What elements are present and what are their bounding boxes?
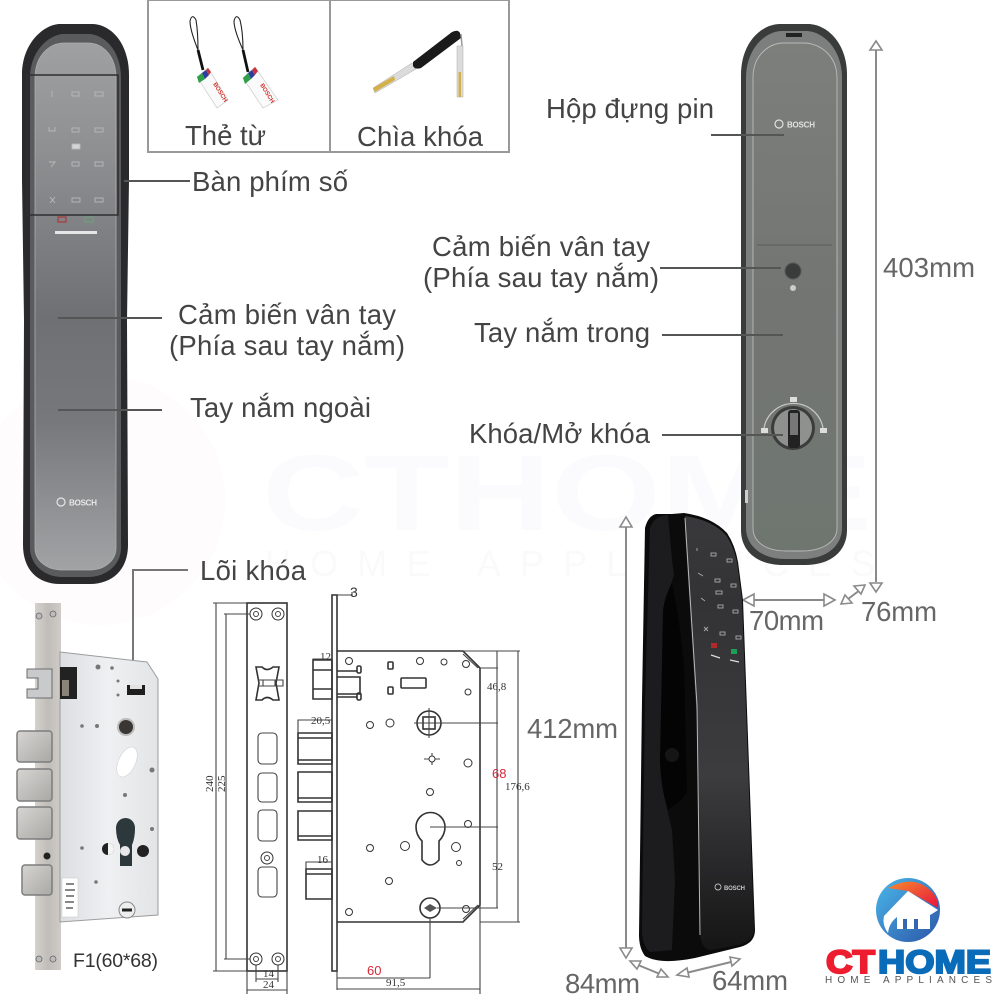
panel: accessories box (148, 0, 509, 152)
logo: CTHOME (825, 878, 992, 986)
keypad buttons (697, 548, 741, 639)
diagram: faceplate drawing: 14 (263, 968, 274, 980)
dimension: 76mm depth: 76mm (861, 596, 937, 627)
dimension: 403mm height: 403mm (883, 252, 975, 283)
dimension: 64mm width: 64mm (712, 965, 788, 996)
background watermark: CTHOME (262, 432, 872, 553)
latch and bolts (298, 660, 361, 899)
spindle hole (118, 719, 134, 735)
case holes (346, 658, 472, 916)
lock / unlock knob (761, 397, 827, 450)
dimension numbers: 176,6 (505, 781, 530, 793)
background watermark (0, 375, 875, 625)
panel: front of lock (22, 24, 129, 584)
dimension numbers: 46,8 (487, 681, 507, 693)
callout: outer handle: Tay nắm ngoài (190, 392, 371, 423)
dimension numbers: 68 (492, 766, 506, 781)
dimension: 84mm depth: 84mm (565, 968, 640, 999)
callout: battery box: Hộp đựng pin (546, 93, 714, 124)
dimension: 403mm height (870, 41, 975, 592)
dimension: 84mm depth (565, 961, 668, 999)
icon: key cards (190, 17, 278, 108)
stickers (113, 744, 141, 780)
panel: mortise lock photo (17, 603, 158, 972)
keypad buttons (49, 91, 103, 203)
wordmark: HOME (878, 944, 991, 980)
diagram: faceplate drawing: 225 (216, 775, 228, 792)
fingerprint sensor (785, 263, 801, 291)
callout: front fingerprint sensor (58, 299, 405, 361)
diagram: mortise case drawing (298, 584, 530, 994)
dimension: 412mm height: 412mm (527, 713, 618, 744)
dimension numbers: 52 (492, 861, 503, 873)
diagram: faceplate drawing: 24 (263, 979, 274, 991)
holes (80, 664, 154, 884)
callout: rear fingerprint sensor: (Phía sau tay nắm) (423, 262, 659, 293)
logo: Bosch rear: BOSCH (787, 120, 815, 130)
callout: keypad: Bàn phím số (192, 166, 348, 197)
keypad highlight box (27, 75, 118, 215)
keyhole (116, 818, 135, 866)
callout: front fingerprint sensor: (Phía sau tay nắm) (169, 330, 405, 361)
icon: emergency key (373, 31, 463, 97)
light bar (55, 231, 97, 234)
callout: inner handle: Tay nắm trong (474, 317, 650, 348)
callout: mortise core (133, 555, 307, 669)
dimension numbers: 20,5 (311, 715, 331, 727)
logo: Bosch front: BOSCH (69, 498, 97, 508)
dimension numbers (311, 584, 530, 989)
wordmark: CT (826, 944, 876, 980)
dimension numbers: 12 (320, 651, 331, 663)
callout: mortise core: Lõi khóa (200, 555, 307, 586)
tagline: HOME APPLIANCES (825, 975, 992, 986)
diagram: faceplate drawing (204, 603, 287, 994)
dimension: 412mm height (527, 517, 632, 958)
logo: Bosch perspective (715, 884, 745, 892)
dimension: 70mm width (743, 594, 835, 636)
background watermark: HOME APPLIANCES (265, 543, 875, 584)
dimension numbers: 3 (350, 584, 358, 600)
panel: rear of lock (741, 24, 847, 565)
logo mark (876, 878, 940, 942)
bolts (17, 669, 52, 895)
wordmark (826, 944, 991, 980)
logo: Bosch perspective: BOSCH (724, 886, 745, 892)
label: model: F1(60*68) (73, 950, 158, 972)
callout: front fingerprint sensor: Cảm biến vân tay (178, 299, 396, 330)
dimension numbers: 16 (317, 854, 328, 866)
callout: rear fingerprint sensor (423, 231, 781, 293)
status lights (711, 643, 739, 662)
status lights (58, 217, 93, 222)
label: key: Chìa khóa (357, 121, 484, 152)
dimension: 64mm width (677, 957, 788, 996)
logo: Bosch front (57, 498, 97, 508)
icon: key cards: BOSCH (211, 82, 228, 103)
dimension text: 240 (204, 775, 216, 792)
icon: key cards: BOSCH (258, 83, 275, 104)
dimension: 76mm depth (841, 585, 937, 627)
label: key card: Thẻ từ (185, 120, 266, 151)
callout: lock knob: Khóa/Mở khóa (469, 418, 651, 449)
logo: Bosch rear (775, 120, 815, 130)
dimension numbers: 91,5 (386, 977, 406, 989)
callout: rear fingerprint sensor: Cảm biến vân tay (432, 231, 650, 262)
dimension numbers: 60 (367, 963, 381, 978)
dimension: 70mm width: 70mm (749, 605, 824, 636)
panel: perspective lock photo (639, 513, 755, 961)
